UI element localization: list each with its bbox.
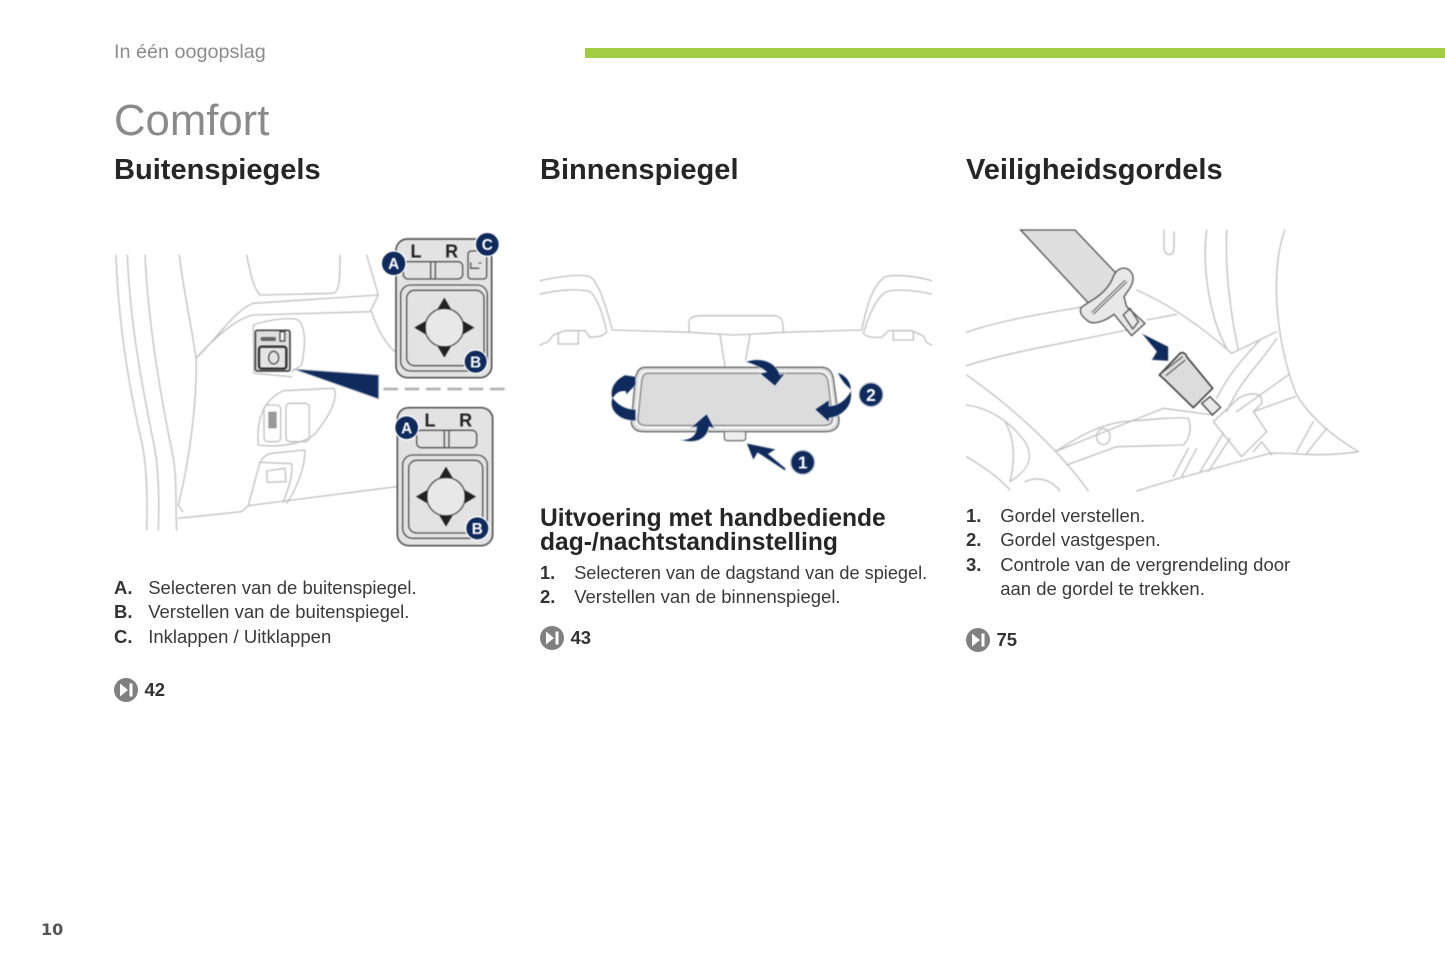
- seat line drawing: [967, 230, 1358, 491]
- page reference 43: [540, 626, 591, 650]
- upper control panel: [396, 239, 492, 378]
- arrow: [1142, 333, 1168, 361]
- lower control panel: L: [424, 410, 436, 430]
- subheading: version note: dag-/nachtstandinstelling: [540, 529, 838, 556]
- page reference 75: [966, 628, 1017, 652]
- page reference 42: 42: [144, 679, 165, 700]
- lower control panel: R: [459, 410, 472, 430]
- list: mirror functions: C.: [114, 626, 132, 647]
- illustration: exterior mirror controls: [114, 232, 506, 548]
- badge 1: [791, 450, 815, 474]
- page reference 75: 75: [996, 629, 1017, 650]
- title: Comfort: [114, 96, 269, 145]
- badges A B C: C: [482, 237, 493, 254]
- list: mirror functions: Verstellen van de buitenspiegel.: [148, 601, 409, 622]
- subheading: version note: [540, 505, 886, 556]
- heading: Veiligheidsgordels: Veiligheidsgordels: [966, 154, 1223, 186]
- list: seat belt steps: [966, 505, 1290, 599]
- list: mirror functions: Inklappen / Uitklappen: [148, 626, 331, 647]
- panel: Buitenspiegels: [114, 154, 506, 702]
- list: mirror functions: [114, 577, 417, 647]
- list: mirror steps: [540, 563, 927, 607]
- windscreen line drawing: [540, 275, 932, 367]
- list: mirror functions: A.: [114, 577, 132, 598]
- subheading: version note: Uitvoering met handbediende: [540, 505, 886, 532]
- list: mirror functions: B.: [114, 601, 132, 622]
- list: seat belt steps: aan de gordel te trekken.: [1000, 578, 1205, 599]
- buckle: [1159, 353, 1221, 415]
- page number: 10: [41, 920, 63, 939]
- belt strap and tongue: [1021, 230, 1145, 336]
- page reference 42: [114, 678, 165, 702]
- small switch block: [255, 330, 290, 371]
- heading: Buitenspiegels: Buitenspiegels: [114, 154, 321, 186]
- list: seat belt steps: Gordel vastgespen.: [1000, 529, 1161, 550]
- badge 2: 2: [866, 385, 876, 405]
- list: seat belt steps: 2.: [966, 529, 981, 550]
- panel: Binnenspiegel: [539, 154, 933, 650]
- badges A B C: A: [401, 420, 412, 437]
- section label: In één oogopslag: [114, 41, 266, 63]
- badges A B C: B: [470, 354, 481, 371]
- list: seat belt steps: 3.: [966, 554, 981, 575]
- list: seat belt steps: 1.: [966, 505, 981, 526]
- door and dashboard line drawing: [116, 255, 397, 530]
- list: mirror steps: 1.: [540, 563, 555, 583]
- badge 2: [859, 383, 883, 407]
- lower control panel: [397, 408, 493, 546]
- page reference 43: 43: [570, 627, 591, 648]
- upper control panel: R: [445, 242, 458, 262]
- list: mirror steps: Verstellen van de binnenspiegel.: [574, 586, 841, 607]
- list: seat belt steps: Gordel verstellen.: [1000, 505, 1145, 526]
- badges A B C: B: [472, 521, 483, 538]
- list: seat belt steps: Controle van de vergrendeling door: [1000, 554, 1290, 575]
- mirror body: [631, 367, 839, 441]
- green header bar: [585, 48, 1445, 58]
- badges A B C: [381, 232, 499, 540]
- badge 1: 1: [798, 453, 808, 473]
- panel: Veiligheidsgordels: [966, 154, 1360, 652]
- badges A B C: A: [388, 256, 399, 273]
- list: mirror functions: Selecteren van de buitenspiegel.: [148, 577, 417, 598]
- upper control panel: L: [410, 242, 422, 262]
- illustration: interior mirror: [539, 274, 933, 476]
- pointer wedge: [293, 369, 379, 399]
- list: mirror steps: Selecteren van de dagstand van de spiegel.: [574, 563, 927, 583]
- dashed divider: [383, 385, 507, 393]
- illustration: seat belt: [966, 228, 1360, 492]
- list: mirror steps: 2.: [540, 586, 555, 607]
- rotation arrows: [611, 360, 851, 471]
- heading: Binnenspiegel: Binnenspiegel: [540, 154, 739, 186]
